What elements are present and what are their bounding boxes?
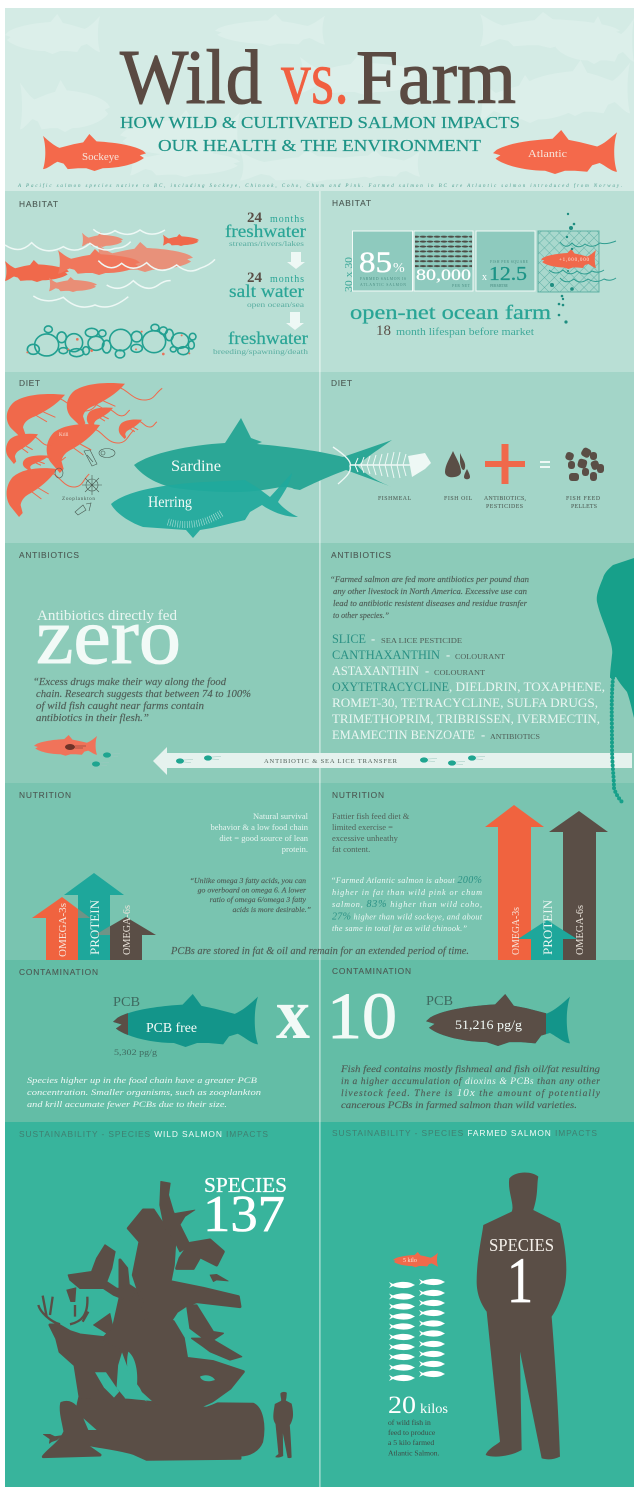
fish oil drops xyxy=(444,451,472,502)
heading: ANTIBIOTICS xyxy=(331,550,391,560)
drug list: ANTIBIOTICS xyxy=(490,732,540,741)
subtitle: HOW WILD & CULTIVATED SALMON IMPACTS xyxy=(120,113,520,132)
drug list: ROMET-30, TETRACYCLINE, SULFA DRUGS, xyxy=(332,696,598,710)
lifecycle: breeding freshwater: breeding/spawning/death xyxy=(213,347,308,356)
small man scale xyxy=(273,1392,293,1458)
explanation: and krill accumate fewer PCBs due to their size. xyxy=(27,1099,227,1109)
lifecycle: salt water: months xyxy=(270,274,304,285)
5 kilo salmon: 5 kilo xyxy=(403,1258,417,1264)
zooplankton icons: Zooplankton xyxy=(62,496,95,502)
subtitle: OUR HEALTH & THE ENVIRONMENT xyxy=(158,136,482,155)
water waves xyxy=(5,229,215,307)
species note: A Pacific salmon species native to BC, including Sockeye, Chinook, Coho, Chum and Pink. Farmed salmon in BC are Atlantic salmon introduced from Norway. xyxy=(17,184,622,189)
stat box: 12.5: PER METRE xyxy=(490,284,509,288)
heading: SUSTAINABILITY - SPECIES FARMED SALMON IMPACTS xyxy=(332,1128,597,1138)
heading: DIET xyxy=(19,378,40,388)
20 kilos stat: feed to produce xyxy=(388,1428,436,1437)
20 kilos stat: kilos xyxy=(420,1401,448,1416)
quote: any other livestock in North America. Excessive use can xyxy=(333,587,527,596)
panel: sustainability wild xyxy=(19,1129,293,1459)
sea louse illustration xyxy=(597,558,634,803)
net with farmed salmon xyxy=(538,213,616,324)
panel: contamination farm xyxy=(332,966,601,1111)
nutrition note: fat content. xyxy=(332,844,370,854)
quote: chain. Research suggests that between 74 to 100% xyxy=(36,689,251,700)
fish oil drops: FISH OIL xyxy=(444,496,472,502)
quote: “Farmed Atlantic salmon is about 200% xyxy=(331,875,482,886)
quote: 27% higher than wild sockeye, and about xyxy=(332,912,483,922)
species 1 stat: SPECIES xyxy=(489,1235,554,1255)
fish: herring: Herring xyxy=(148,494,192,511)
panel: habitat farm xyxy=(332,198,616,339)
nutrient arrows xyxy=(32,873,156,960)
arrow: antibiotic transfer: ANTIBIOTIC & SEA LICE TRANSFER xyxy=(264,758,398,765)
quote: lead to antibiotic resistent diseases and residue trasnfer xyxy=(333,599,528,608)
PCB value: 5,302 pg/g xyxy=(114,1047,158,1057)
quote: “Unlike omega 3 fatty acids, you can xyxy=(190,876,306,885)
farmed fish PCB: 51,216 pg/g xyxy=(455,1017,523,1032)
salmon eggs xyxy=(26,324,196,358)
quote: salmon, 83% higher than wild coho, xyxy=(332,899,482,910)
explanation: Fish feed contains mostly fishmeal and fish oil/fat resulting xyxy=(340,1064,600,1075)
drug list: - xyxy=(425,664,429,678)
title: vs. xyxy=(281,34,349,120)
drug list: - xyxy=(446,648,450,662)
net with farmed salmon: +1,000,000 xyxy=(559,258,590,263)
PCB label: PCB xyxy=(113,995,140,1010)
panel: diet wild xyxy=(6,378,392,538)
lifecycle: freshwater: 24 xyxy=(247,210,262,226)
feed fish stack xyxy=(389,1279,445,1381)
x10 multiplier xyxy=(276,974,397,1054)
food web silhouette xyxy=(38,1182,263,1459)
man silhouette xyxy=(477,1172,566,1459)
panel: antibiotics farm xyxy=(330,550,634,803)
nutrition note: Natural survival xyxy=(253,811,309,821)
panel: header xyxy=(5,8,634,191)
stat box: 80,000: 80,000 xyxy=(416,267,471,284)
additives plus: PESTICIDES xyxy=(486,504,523,510)
lifecycle: freshwater xyxy=(225,210,306,248)
fishmeal skeleton xyxy=(333,447,431,502)
krill swarm: Krill xyxy=(59,433,69,438)
panel: antibiotics wild xyxy=(19,550,251,767)
panel: nutrition farm xyxy=(331,790,608,960)
farm caption: open-net ocean farm xyxy=(350,302,552,324)
nutrition note: excessive unheathy xyxy=(332,833,399,843)
farmed fish PCB xyxy=(426,994,570,1046)
drug list xyxy=(332,632,605,742)
explanation xyxy=(27,1075,262,1109)
x10 multiplier: x xyxy=(276,974,310,1054)
stat box: 85 percent: FARMED SALMON IS xyxy=(360,277,406,281)
nutrition note: protein. xyxy=(282,844,308,854)
farm caption: 18 xyxy=(376,323,391,339)
additives plus xyxy=(484,444,527,510)
panel: sustainability farm xyxy=(332,1128,597,1459)
fish: sardine xyxy=(134,418,392,492)
nutrition note xyxy=(211,811,309,854)
lifecycle: salt water xyxy=(229,270,305,309)
species 137 stat: SPECIES xyxy=(204,1173,287,1197)
explanation: Species higher up in the food chain have a greater PCB xyxy=(27,1075,258,1085)
heading: NUTRITION xyxy=(19,790,71,800)
title: Farm xyxy=(356,34,516,120)
PCB storage note: PCBs are stored in fat & oil and remain for an extended period of time. xyxy=(170,946,469,957)
panel: diet farm xyxy=(331,378,604,510)
explanation: concentration. Smaller organisms, such as zooplankton xyxy=(27,1087,262,1097)
species 1 stat xyxy=(489,1235,554,1317)
lifecycle: salt water: 24 xyxy=(247,270,262,286)
fish feed pellets: PELLETS xyxy=(571,504,597,510)
fish: herring xyxy=(111,473,298,538)
PCB label: PCB xyxy=(426,994,453,1009)
quote: acids is more desirable.” xyxy=(232,905,311,914)
additives plus: ANTIBIOTICS, xyxy=(484,496,527,502)
drug list: OXYTETRACYCLINE xyxy=(332,680,449,694)
drug list: TRIMETHOPRIM, TRIBRISSEN, IVERMECTIN, xyxy=(332,712,600,726)
drug list: CANTHAXANTHIN xyxy=(332,648,440,662)
fish: atlantic: Atlantic xyxy=(528,148,567,160)
drug list: , DIELDRIN, TOXAPHENE, xyxy=(449,680,605,694)
lifecycle: freshwater: months xyxy=(270,214,304,225)
subtitle xyxy=(120,113,520,155)
fish: atlantic xyxy=(493,130,617,174)
stat box: 85 percent: % xyxy=(393,261,405,276)
farm caption xyxy=(350,302,552,339)
nutrition note xyxy=(332,811,410,854)
species 137 stat: 137 xyxy=(203,1186,285,1243)
heading: CONTAMINATION xyxy=(332,966,411,976)
stat box: 80,000: PER NET xyxy=(452,284,471,288)
title: Wild xyxy=(120,34,262,120)
drug list: EMAMECTIN BENZOATE xyxy=(332,728,475,742)
drug list: COLOURANT xyxy=(434,668,485,677)
nutrient arrows: PROTEIN xyxy=(88,900,102,955)
stat box: 80,000 xyxy=(414,231,473,291)
heading: CONTAMINATION xyxy=(19,967,98,977)
zooplankton icons xyxy=(55,448,115,515)
infected salmon xyxy=(34,735,97,756)
lifecycle: freshwater: streams/rivers/lakes xyxy=(229,239,304,248)
wild salmon school xyxy=(5,232,199,292)
zero antibiotics stat: zero xyxy=(36,593,181,681)
explanation: in a higher accumulation of dioxins & PCBs than any other xyxy=(341,1076,600,1087)
stat box: 85 percent: 85 xyxy=(359,246,392,279)
nutrition note: behavior & a low food chain xyxy=(211,822,309,832)
heading: SUSTAINABILITY - SPECIES WILD SALMON IMPACTS xyxy=(19,1129,268,1139)
fish: sockeye xyxy=(43,134,146,171)
panel: contamination wild xyxy=(19,967,262,1109)
heading: DIET xyxy=(331,378,352,388)
wild fish PCB: PCB free xyxy=(146,1021,197,1036)
arrow: down xyxy=(286,312,304,330)
quote xyxy=(190,876,311,914)
arrow: down xyxy=(287,252,305,269)
quote: go overboard on omega 6. A lower xyxy=(198,886,307,894)
equals sign xyxy=(540,461,550,468)
drug list: - xyxy=(481,728,485,742)
title xyxy=(120,34,516,120)
stat box: 12.5: 12.5 xyxy=(489,263,527,285)
explanation: livestock feed. There is 10x the amount of potentially xyxy=(341,1087,601,1099)
explanation xyxy=(340,1064,601,1111)
stat box: 85 percent xyxy=(352,231,412,291)
zero antibiotics stat: Antibiotics directly fed xyxy=(37,608,177,624)
net dimensions: 30 x 30 xyxy=(344,257,355,292)
quote: “Farmed salmon are fed more antibiotics per pound than xyxy=(330,575,529,584)
nutrition note: Fattier fish feed diet & xyxy=(332,811,410,821)
20 kilos stat: 20 xyxy=(388,1392,416,1419)
heading: NUTRITION xyxy=(332,790,384,800)
20 kilos stat: Atlantic Salmon. xyxy=(388,1448,440,1458)
stat box: 12.5: x xyxy=(482,272,487,283)
nutrient arrows: PROTEIN xyxy=(541,900,555,955)
quote: antibiotics in their flesh.” xyxy=(36,713,149,724)
drug list: SLICE xyxy=(332,632,366,646)
panel: nutrition wild xyxy=(19,790,311,960)
20 kilos stat: of wild fish in xyxy=(388,1418,431,1427)
quote: ratio of omega 6/omega 3 fatty xyxy=(210,895,307,904)
drug list: COLOURANT xyxy=(455,652,505,661)
quote: to other species.” xyxy=(333,611,390,620)
lifecycle: salt water: salt water xyxy=(229,281,304,301)
heading: ANTIBIOTICS xyxy=(19,550,79,560)
explanation: cancerous PCBs in farmed salmon than wild varieties. xyxy=(341,1100,577,1111)
lifecycle: breeding freshwater xyxy=(213,328,308,356)
farm caption: month lifespan before market xyxy=(396,327,534,338)
5 kilo salmon xyxy=(393,1252,438,1267)
panel: habitat wild xyxy=(5,199,308,358)
species 1 stat: 1 xyxy=(507,1245,533,1317)
nutrition note: diet = good source of lean xyxy=(219,833,309,843)
quote xyxy=(330,575,529,620)
quote: of wild fish caught near farms contain xyxy=(36,701,204,712)
lifecycle: breeding freshwater: freshwater xyxy=(228,328,308,348)
drug list: ASTAXANTHIN xyxy=(332,664,419,678)
quote: “Excess drugs make their way along the food xyxy=(33,677,227,688)
nutrient arrows xyxy=(485,805,608,960)
20 kilos stat xyxy=(388,1392,448,1458)
stat box: 12.5: FISH PER SQUARE xyxy=(490,260,529,264)
lifecycle: salt water: open ocean/sea xyxy=(247,300,305,309)
drug list: - xyxy=(371,632,375,646)
sea lice xyxy=(92,752,120,767)
fish: sockeye: Sockeye xyxy=(82,151,119,163)
quote: the same in total fat as wild chinook.” xyxy=(332,924,467,933)
krill swarm xyxy=(6,383,162,517)
fishmeal skeleton: FISHMEAL xyxy=(378,496,411,502)
nutrient arrows: OMEGA-3s xyxy=(511,907,522,955)
stat box: 12.5 xyxy=(476,231,535,291)
quote xyxy=(33,677,251,724)
nutrient arrows: OMEGA-3s xyxy=(58,903,69,957)
heading: HABITAT xyxy=(19,199,58,209)
wild fish PCB xyxy=(113,994,258,1047)
arrow: antibiotic transfer xyxy=(153,747,632,775)
20 kilos stat: a 5 kilo farmed xyxy=(388,1438,434,1447)
fish feed pellets xyxy=(564,447,604,510)
quote: higher in fat than wild pink or chum xyxy=(332,888,482,897)
nutrient arrows: OMEGA-6s xyxy=(122,905,133,955)
fish: sardine: Sardine xyxy=(171,458,221,475)
background fish pattern xyxy=(5,12,634,182)
lifecycle: freshwater: freshwater xyxy=(225,221,306,241)
stat box: 85 percent: ATLANTIC SALMON xyxy=(360,283,406,287)
heading: HABITAT xyxy=(332,198,371,208)
x10 multiplier: 10 xyxy=(327,980,397,1053)
quote xyxy=(331,875,483,933)
drug list: SEA LICE PESTICIDE xyxy=(381,636,462,645)
fish feed pellets: FISH FEED xyxy=(566,496,600,502)
nutrition note: limited exercise = xyxy=(332,822,393,832)
nutrient arrows: OMEGA-6s xyxy=(575,905,586,955)
